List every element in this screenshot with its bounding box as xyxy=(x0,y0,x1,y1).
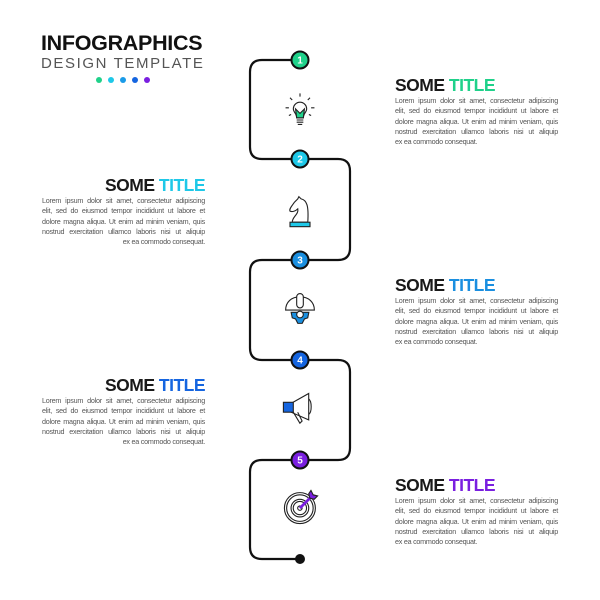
block 3: ex ea commodo consequat. xyxy=(395,337,477,346)
block 2: elit, sed do eiusmod tempor incididunt ut labore et xyxy=(42,206,205,215)
icon: helmet gear xyxy=(285,293,315,324)
header title: INFOGRAPHICS xyxy=(41,31,202,55)
block 4: dolore magna aliqua. Ut enim ad minim veniam, quis xyxy=(42,417,205,426)
block 3: Lorem ipsum dolor sit amet, consectetur adipiscing xyxy=(395,296,558,305)
block 4: elit, sed do eiusmod tempor incididunt ut labore et xyxy=(42,406,205,415)
block 2: dolore magna aliqua. Ut enim ad minim veniam, quis xyxy=(42,217,205,226)
block 5: elit, sed do eiusmod tempor incididunt ut labore et xyxy=(395,506,558,515)
block 5 xyxy=(395,475,558,546)
block 4 xyxy=(42,375,206,446)
block 3 xyxy=(395,275,558,346)
block 1 xyxy=(395,75,558,146)
block 2: nostrud exercitation ullamco laboris nisi ut aliquip xyxy=(42,227,205,236)
timeline path: 1 xyxy=(297,56,303,66)
timeline path: 2 xyxy=(297,154,303,166)
icon: chess knight xyxy=(289,196,311,228)
block 1: nostrud exercitation ullamco laboris nisi ut aliquip xyxy=(395,127,558,136)
block 3: nostrud exercitation ullamco laboris nisi ut aliquip xyxy=(395,327,558,336)
block 5: SOME TITLE xyxy=(395,475,495,495)
block 5: dolore magna aliqua. Ut enim ad minim veniam, quis xyxy=(395,517,558,526)
block 1: dolore magna aliqua. Ut enim ad minim veniam, quis xyxy=(395,117,558,126)
block 4: nostrud exercitation ullamco laboris nisi ut aliquip xyxy=(42,427,205,436)
block 4: SOME TITLE xyxy=(105,375,205,395)
block 5: ex ea commodo consequat. xyxy=(395,537,477,546)
block 3: dolore magna aliqua. Ut enim ad minim veniam, quis xyxy=(395,317,558,326)
block 5: Lorem ipsum dolor sit amet, consectetur adipiscing xyxy=(395,496,558,505)
icon: target xyxy=(284,490,319,524)
block 1: SOME TITLE xyxy=(395,75,495,95)
block 3: SOME TITLE xyxy=(395,275,495,295)
header title: DESIGN TEMPLATE xyxy=(41,55,204,72)
block 4: ex ea commodo consequat. xyxy=(123,437,205,446)
timeline path: 5 xyxy=(297,456,303,466)
block 5: nostrud exercitation ullamco laboris nisi ut aliquip xyxy=(395,527,558,536)
block 1: ex ea commodo consequat. xyxy=(395,137,477,146)
block 1: Lorem ipsum dolor sit amet, consectetur adipiscing xyxy=(395,96,558,105)
timeline path: 3 xyxy=(297,256,303,266)
header title xyxy=(41,31,204,72)
block 1: elit, sed do eiusmod tempor incididunt ut labore et xyxy=(395,106,558,115)
timeline path: 4 xyxy=(297,356,303,366)
block 2 xyxy=(42,175,206,246)
block 4: Lorem ipsum dolor sit amet, consectetur adipiscing xyxy=(42,396,205,405)
icon: lightbulb xyxy=(286,93,314,125)
block 2: SOME TITLE xyxy=(105,175,205,195)
block 2: ex ea commodo consequat. xyxy=(123,237,205,246)
block 3: elit, sed do eiusmod tempor incididunt ut labore et xyxy=(395,306,558,315)
icon: megaphone xyxy=(282,392,312,424)
block 2: Lorem ipsum dolor sit amet, consectetur adipiscing xyxy=(42,196,205,205)
